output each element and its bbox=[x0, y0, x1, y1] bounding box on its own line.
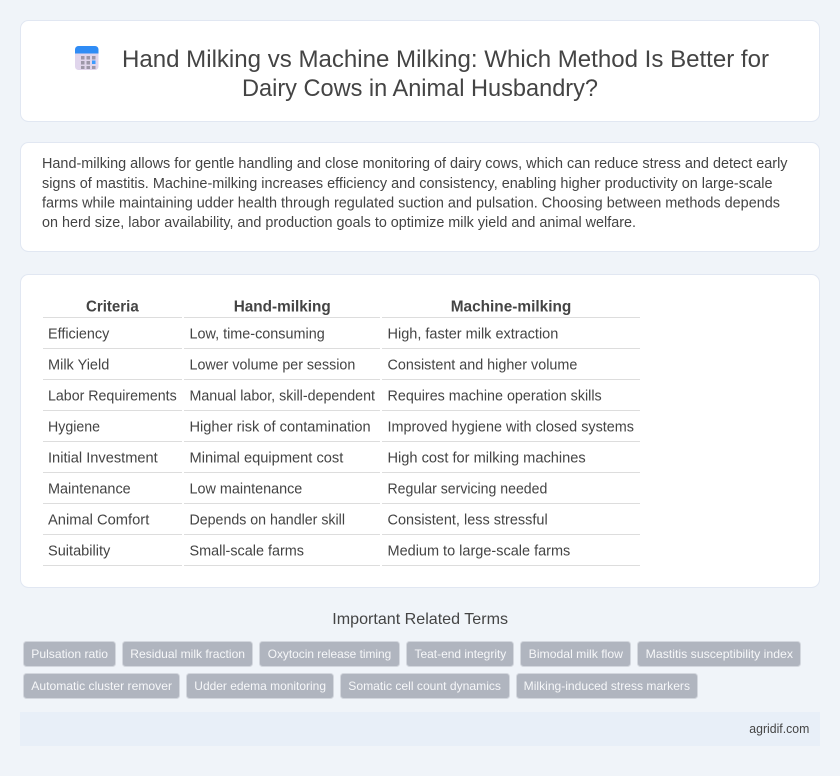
table header row: Criteria bbox=[86, 298, 139, 316]
row: milk yield: Consistent and higher volume bbox=[388, 358, 577, 374]
tag: bimodal milk flow bbox=[520, 642, 630, 666]
row: maintenance: Low maintenance bbox=[190, 482, 302, 498]
tag: teat-end integrity: Teat-end integrity bbox=[414, 647, 506, 661]
row: milk yield bbox=[48, 358, 577, 374]
panel: intro paragraph bbox=[20, 142, 820, 252]
intro text block: signs of mastitis. Machine-milking increases efficiency and consistency, enabling higher productivity on large-scale bbox=[42, 176, 772, 192]
row: initial investment: Minimal equipment cost bbox=[190, 450, 343, 466]
tag: oxytocin release timing bbox=[260, 642, 400, 666]
table header row bbox=[86, 298, 571, 316]
panel: header bbox=[20, 20, 820, 122]
table header row: Machine-milking bbox=[451, 298, 571, 316]
row: hygiene bbox=[48, 420, 634, 436]
footer bbox=[20, 712, 820, 746]
row: milk yield: Milk Yield bbox=[48, 358, 109, 374]
tag: mastitis susceptibility index: Mastitis susceptibility index bbox=[646, 647, 793, 661]
row: efficiency bbox=[48, 326, 558, 342]
tag: pulsation ratio bbox=[24, 642, 116, 666]
tag: pulsation ratio: Pulsation ratio bbox=[31, 647, 108, 661]
panel: comparison table bbox=[20, 274, 820, 588]
panel: related term tags bbox=[24, 642, 800, 698]
heading: important related terms: Important Related Terms bbox=[332, 611, 508, 628]
row: initial investment: Initial Investment bbox=[48, 450, 158, 466]
table header row: Hand-milking bbox=[234, 298, 331, 316]
tag: automatic cluster remover: Automatic cluster remover bbox=[31, 679, 172, 693]
row: suitability: Suitability bbox=[48, 544, 111, 560]
row: maintenance: Maintenance bbox=[48, 482, 131, 498]
row: initial investment bbox=[48, 450, 586, 466]
row: hygiene: Higher risk of contamination bbox=[190, 420, 371, 436]
tag: mastitis susceptibility index bbox=[638, 642, 800, 666]
footer: agridif.com bbox=[749, 721, 809, 736]
title: Hand Milking vs Machine Milking: Which Method Is Better for bbox=[122, 46, 769, 73]
intro text block: Hand-milking allows for gentle handling and close monitoring of dairy cows, which can reduce stress and detect early bbox=[42, 156, 788, 172]
row: hygiene: Hygiene bbox=[48, 420, 100, 436]
tag: residual milk fraction bbox=[122, 642, 252, 666]
intro text block: on herd size, labor availability, and production goals to optimize milk yield and animal welfare. bbox=[42, 215, 636, 231]
row: suitability: Small-scale farms bbox=[190, 544, 304, 560]
row: labor requirements: Requires machine operation skills bbox=[388, 388, 602, 404]
row: maintenance bbox=[48, 482, 547, 498]
row: maintenance: Regular servicing needed bbox=[388, 482, 547, 498]
row: milk yield: Lower volume per session bbox=[190, 358, 355, 374]
tag: somatic cell count dynamics: Somatic cell count dynamics bbox=[348, 679, 501, 693]
intro text block: farms while maintaining udder health through regulated suction and pulsation. Choosing between methods depends bbox=[42, 196, 780, 212]
row: labor requirements: Manual labor, skill-dependent bbox=[190, 388, 375, 404]
row: labor requirements: Labor Requirements bbox=[48, 388, 177, 404]
row: labor requirements bbox=[48, 388, 602, 404]
tag: automatic cluster remover bbox=[24, 674, 180, 698]
icon: calendar bbox=[75, 46, 98, 70]
row: hygiene: Improved hygiene with closed systems bbox=[388, 420, 634, 436]
row: animal comfort: Animal Comfort bbox=[48, 512, 149, 528]
tag: udder edema monitoring: Udder edema monitoring bbox=[194, 679, 326, 693]
row: animal comfort bbox=[48, 512, 548, 528]
tag: somatic cell count dynamics bbox=[340, 674, 510, 698]
intro text block bbox=[42, 156, 788, 231]
title bbox=[122, 46, 769, 102]
tag: milking-induced stress markers bbox=[516, 674, 698, 698]
tag: teat-end integrity bbox=[406, 642, 514, 666]
row: suitability bbox=[48, 544, 570, 560]
title: Dairy Cows in Animal Husbandry? bbox=[242, 75, 598, 102]
row: efficiency: Low, time-consuming bbox=[190, 326, 325, 342]
tag: residual milk fraction: Residual milk fraction bbox=[130, 647, 245, 661]
tag: bimodal milk flow: Bimodal milk flow bbox=[529, 647, 623, 661]
row: efficiency: Efficiency bbox=[48, 326, 110, 342]
tag: milking-induced stress markers: Milking-induced stress markers bbox=[524, 679, 690, 693]
tag: oxytocin release timing: Oxytocin release timing bbox=[268, 647, 391, 661]
tag: udder edema monitoring bbox=[186, 674, 334, 698]
row: suitability: Medium to large-scale farms bbox=[388, 544, 570, 560]
row: animal comfort: Consistent, less stressful bbox=[388, 512, 548, 528]
row: animal comfort: Depends on handler skill bbox=[190, 512, 345, 528]
row: initial investment: High cost for milking machines bbox=[388, 450, 586, 466]
row: efficiency: High, faster milk extraction bbox=[388, 326, 558, 342]
